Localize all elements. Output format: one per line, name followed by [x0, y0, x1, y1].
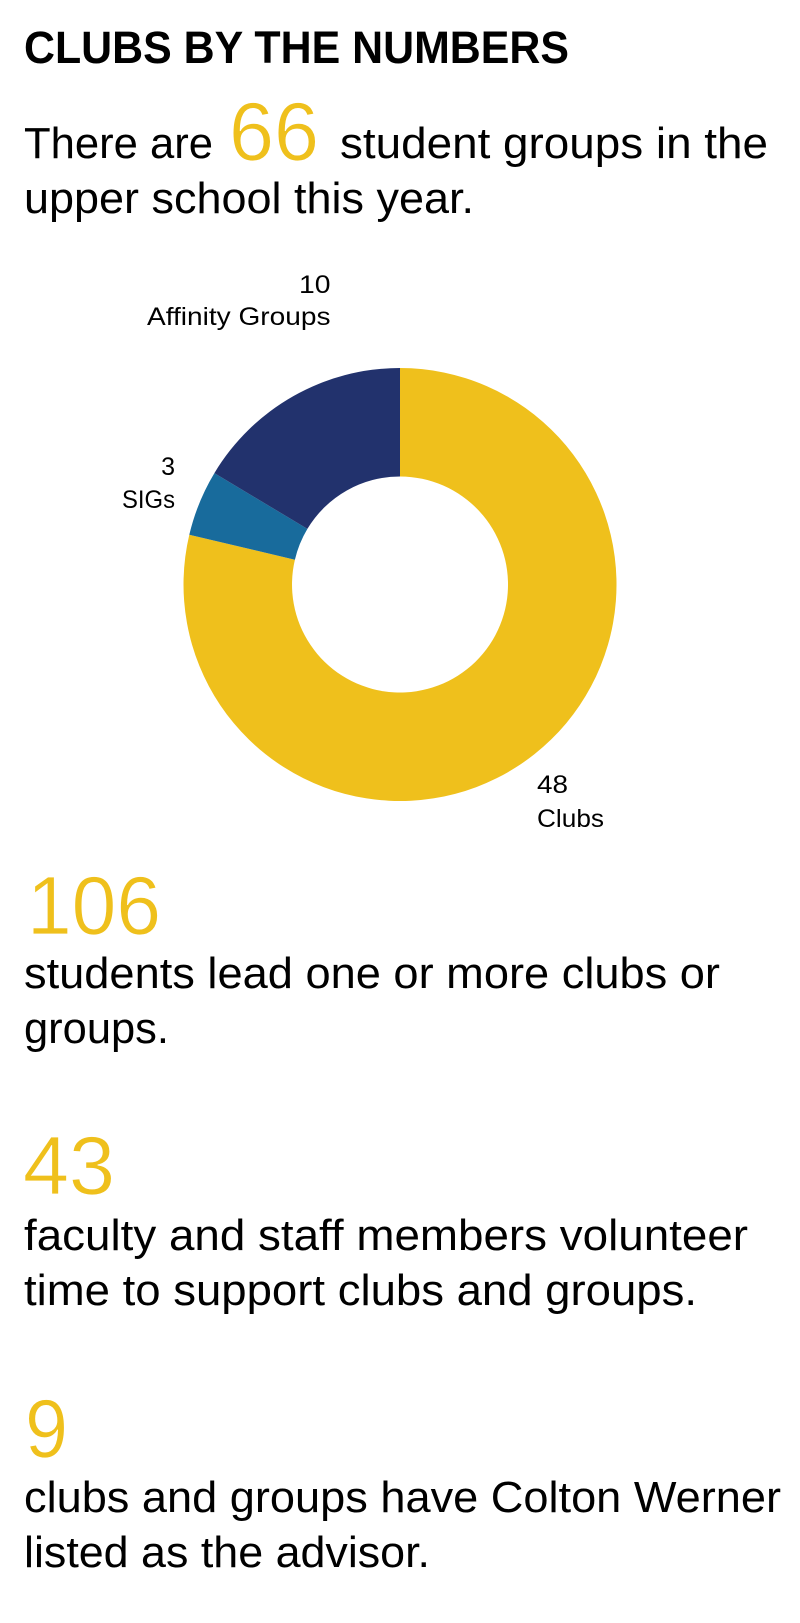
label: Affinity Groups	[147, 271, 330, 331]
stat: 43 faculty and staff	[23, 1119, 748, 1315]
label: SIGs: 3	[161, 453, 175, 481]
label: SIGs: SIGs	[122, 486, 175, 514]
stat: 43 faculty and staff: time to support clubs and groups.	[24, 1266, 697, 1315]
stat: 9 clubs and groups: clubs and groups have Colton Werner	[24, 1473, 781, 1522]
intro text with 66: student groups in the	[340, 119, 768, 168]
intro text with 66: upper school this year.	[24, 174, 474, 223]
donut chart	[184, 368, 617, 801]
label: SIGs	[122, 453, 175, 514]
stat: 106 students: groups.	[24, 1004, 169, 1053]
intro text with 66: There are	[24, 119, 213, 168]
segment: Affinity Groups	[214, 368, 400, 529]
title: CLUBS BY THE NUMBERS	[24, 22, 569, 73]
stat: 43 faculty and staff: faculty and staff members volunteer	[24, 1211, 748, 1260]
intro text with 66: 66	[229, 85, 319, 178]
label: Affinity Groups: 10	[299, 271, 330, 299]
stat: 9 clubs and groups: listed as the advisor.	[24, 1528, 430, 1577]
segment: Clubs	[184, 368, 617, 801]
intro text with 66	[24, 102, 766, 222]
stat: 106 students: students lead one or more clubs or	[24, 949, 720, 998]
stat: 9 clubs and groups: 9	[25, 1382, 68, 1475]
stat: 106 students	[24, 859, 720, 1053]
label: Clubs: 48	[537, 771, 568, 799]
segment: SIGs	[189, 473, 307, 560]
label: Affinity Groups: Affinity Groups	[147, 303, 330, 331]
stat: 106 students: 106	[27, 859, 161, 952]
stat: 43 faculty and staff: 43	[23, 1119, 115, 1212]
label: Clubs: Clubs	[537, 805, 604, 833]
label: Clubs	[537, 771, 604, 833]
stat: 9 clubs and groups	[24, 1382, 781, 1577]
